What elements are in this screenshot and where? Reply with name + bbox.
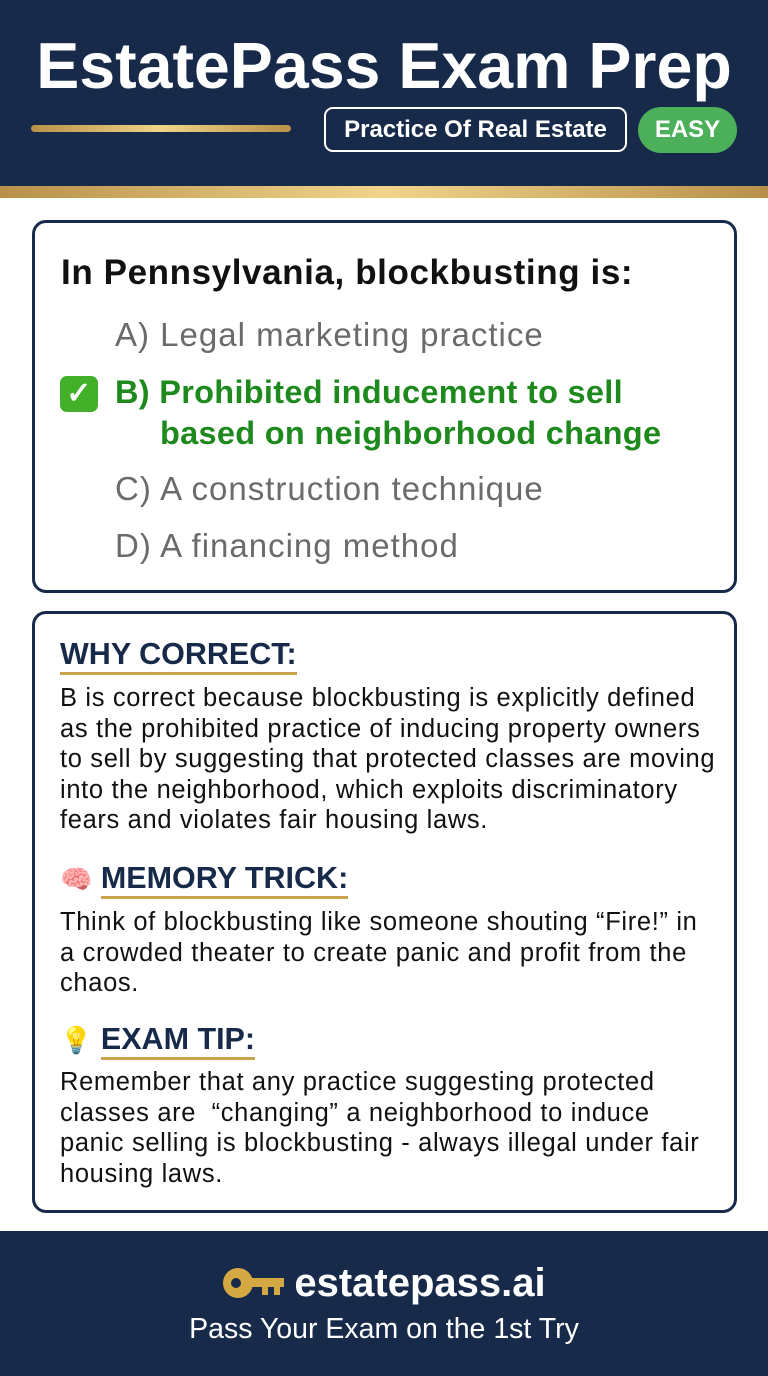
text: why correct: into the neighborhood, which exploits discriminatory xyxy=(60,776,678,804)
gold bar xyxy=(0,186,768,198)
brand: estatepass.ai xyxy=(294,1261,546,1305)
category badge: Practice Of Real Estate xyxy=(344,116,607,143)
gold divider xyxy=(31,125,291,132)
icon: key xyxy=(223,1268,284,1298)
heading: exam tip: 💡 EXAM TIP: xyxy=(60,1022,255,1056)
text: memory trick: a crowded theater to create panic and profit from the xyxy=(60,938,687,966)
difficulty badge: EASY xyxy=(655,116,720,143)
text: why correct: B is correct because blockbusting is explicitly defined xyxy=(60,684,695,712)
text: exam tip: panic selling is blockbusting - always illegal under fair xyxy=(60,1129,699,1157)
difficulty badge xyxy=(638,107,737,153)
text: memory trick: chaos. xyxy=(60,969,139,997)
text: exam tip xyxy=(60,1068,699,1188)
panel: question xyxy=(32,220,737,593)
category badge xyxy=(324,107,627,152)
tagline: Pass Your Exam on the 1st Try xyxy=(189,1313,579,1345)
footer xyxy=(0,1231,768,1376)
option B correct: B) Prohibited inducement to sell xyxy=(115,374,623,410)
option C: C) A construction technique xyxy=(115,470,544,507)
text: why correct xyxy=(60,684,715,834)
text: why correct: fears and violates fair housing laws. xyxy=(60,806,488,834)
option B correct: based on neighborhood change xyxy=(160,415,661,451)
header xyxy=(0,0,768,198)
icon: check: ✓ xyxy=(66,377,92,410)
text: memory trick: Think of blockbusting like someone shouting “Fire!” in xyxy=(60,908,697,936)
text: why correct: to sell by suggesting that protected classes are moving xyxy=(60,745,715,773)
heading: why correct: WHY CORRECT: xyxy=(60,637,297,671)
option A: A) Legal marketing practice xyxy=(115,316,544,353)
heading: memory trick: 🧠 MEMORY TRICK: xyxy=(60,861,348,895)
text: exam tip: housing laws. xyxy=(60,1160,223,1188)
text: why correct: as the prohibited practice of inducing property owners xyxy=(60,714,700,742)
text: exam tip: Remember that any practice suggesting protected xyxy=(60,1068,655,1096)
option B correct xyxy=(60,374,661,451)
icon: check xyxy=(60,376,98,412)
title: EstatePass Exam Prep xyxy=(36,30,732,102)
panel: explanation xyxy=(32,611,737,1213)
option D: D) A financing method xyxy=(115,527,459,564)
text: exam tip: classes are “changing” a neighborhood to induce xyxy=(60,1098,650,1126)
text: memory trick xyxy=(60,908,697,997)
question text: In Pennsylvania, blockbusting is: xyxy=(61,253,633,292)
